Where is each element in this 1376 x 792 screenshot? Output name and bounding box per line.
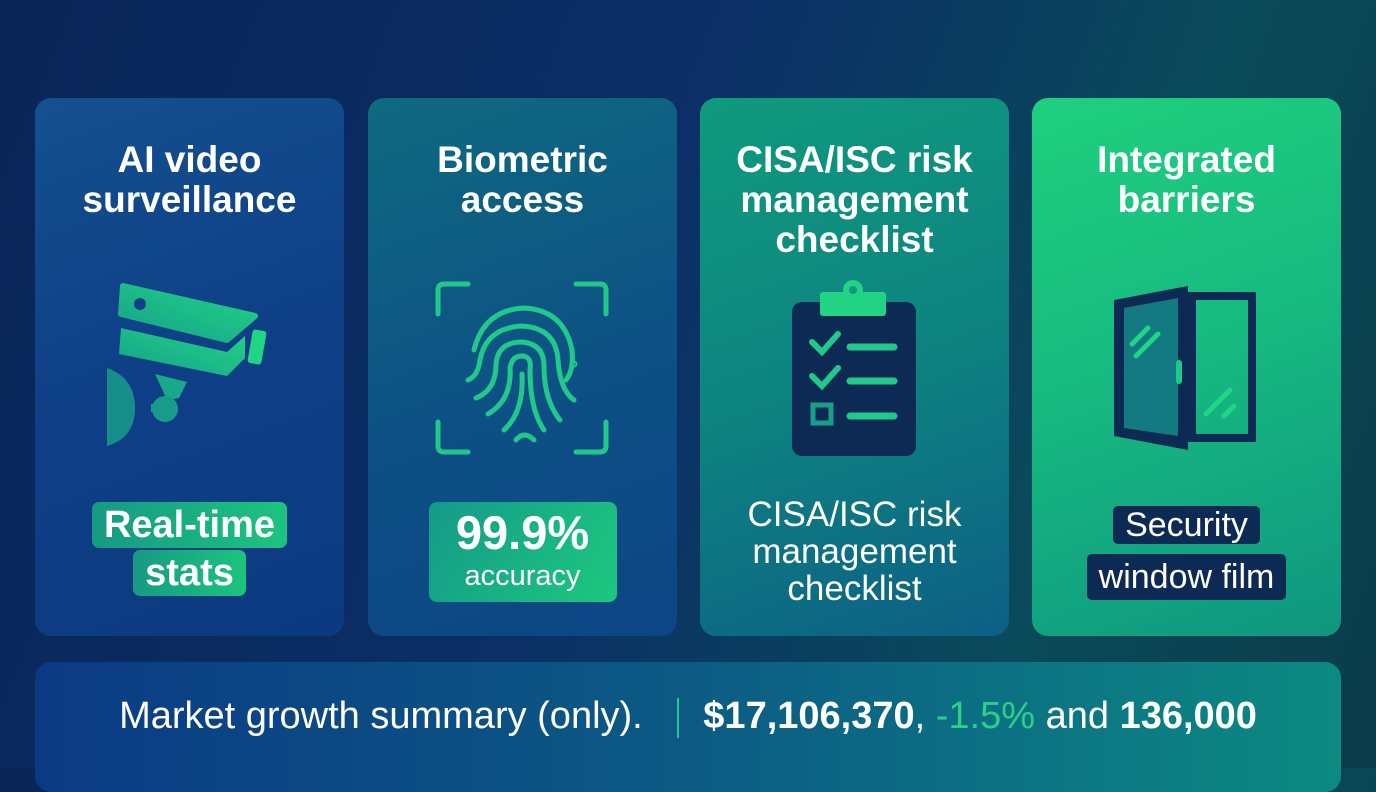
icon: clipboard	[792, 280, 916, 456]
badge: 99.9% accuracy: 99.9%	[456, 506, 589, 559]
icon: door	[1114, 286, 1256, 450]
text: summary line: Market growth summary (only). $17,106,370, -1.5% and 136,000	[119, 695, 1257, 737]
heading: Integrated	[1097, 139, 1276, 180]
text: CISA/ISC risk management checklist: management	[752, 532, 957, 571]
heading: AI video	[118, 139, 261, 180]
heading: surveillance	[83, 179, 296, 220]
badge: 99.9% accuracy: accuracy	[464, 560, 581, 592]
badge: Real-time stats: stats	[145, 552, 234, 594]
heading: management	[740, 179, 969, 220]
heading: barriers	[1118, 179, 1255, 220]
badge: Real-time stats	[92, 502, 287, 596]
heading: checklist	[775, 219, 934, 260]
text: CISA/ISC risk management checklist	[748, 495, 962, 608]
card: Integrated barriers	[1032, 98, 1341, 636]
heading	[1097, 139, 1276, 220]
heading: access	[461, 179, 584, 220]
text: CISA/ISC risk management checklist: CISA/ISC risk	[748, 495, 961, 534]
icon: fingerprint	[436, 282, 608, 454]
heading	[83, 139, 296, 220]
text: CISA/ISC risk management checklist: checklist	[787, 569, 922, 608]
card: AI video surveillance	[35, 98, 344, 636]
badge: 99.9% accuracy	[429, 502, 617, 602]
card: CISA/ISC checklist	[700, 98, 1009, 636]
badge: Security window film: Security	[1125, 506, 1248, 544]
panel: market growth summary	[35, 662, 1341, 792]
badge: Security window film: window film	[1099, 558, 1274, 596]
heading	[437, 139, 608, 220]
badge: Security window film	[1087, 506, 1286, 600]
icon: security camera	[107, 283, 266, 446]
card: Biometric access	[368, 98, 677, 636]
heading: Biometric	[437, 139, 608, 180]
heading	[736, 139, 973, 260]
heading: CISA/ISC risk	[736, 139, 973, 180]
badge: Real-time stats: Real-time	[104, 504, 275, 546]
